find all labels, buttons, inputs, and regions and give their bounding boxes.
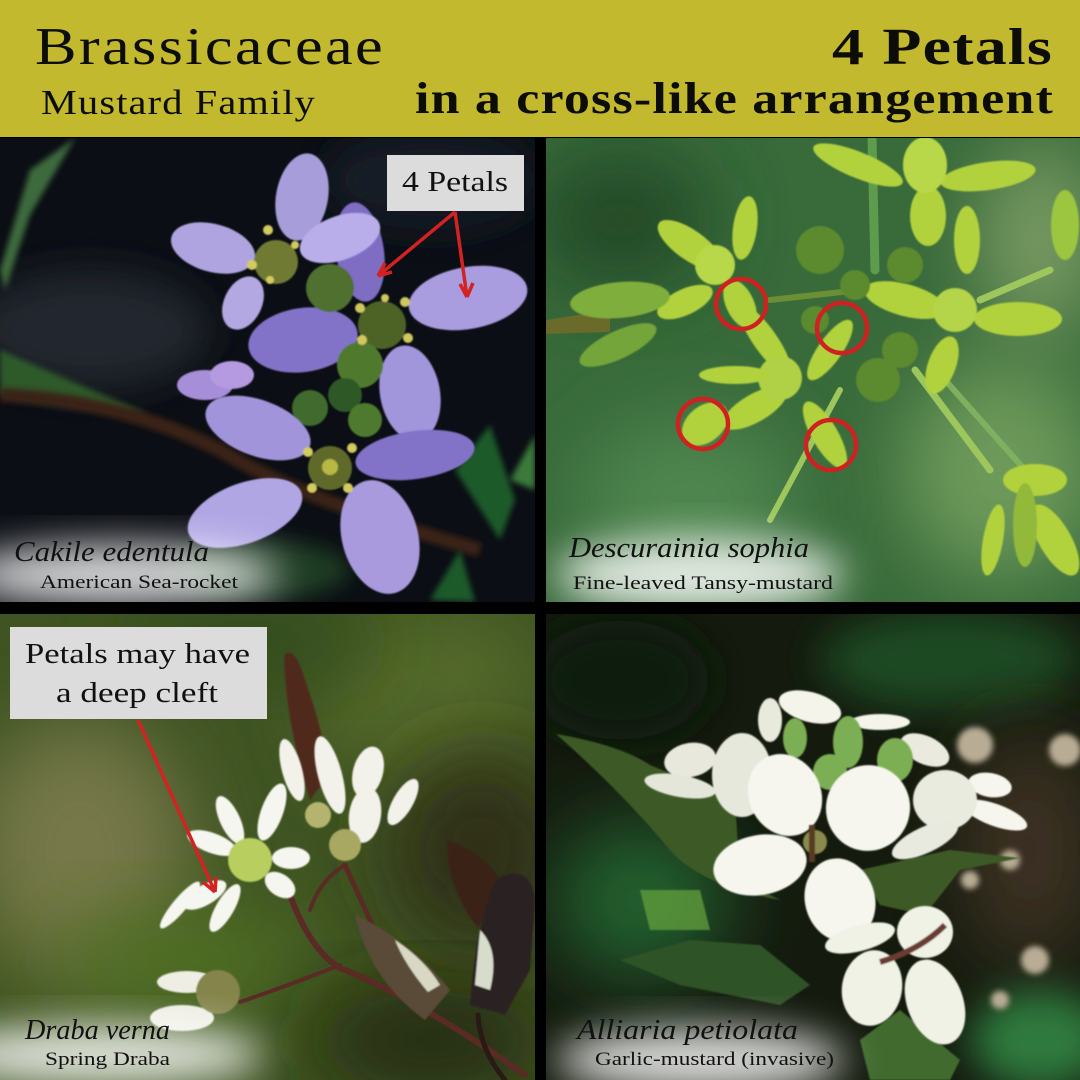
panel: Cakile edentula xyxy=(0,130,540,605)
label: Alliaria petiolata: Alliaria petiolata xyxy=(575,1015,798,1046)
buds xyxy=(783,716,913,790)
label glow xyxy=(0,1025,265,1080)
title: Brassicaceae: Brassicaceae xyxy=(35,18,385,76)
flower: middle xyxy=(244,199,532,445)
label: Alliaria petiolata: Garlic-mustard (invasive) xyxy=(595,1049,834,1070)
subtitle: Mustard Family: Mustard Family xyxy=(41,83,316,122)
flower: lower xyxy=(177,361,478,603)
label glow xyxy=(555,1028,845,1080)
heading: 4 Petals: 4 Petals xyxy=(832,19,1053,76)
stems xyxy=(240,865,525,1080)
flower: lower xyxy=(824,905,966,1046)
callout: deep cleft: a deep cleft xyxy=(56,677,218,709)
arrow: to inner petal xyxy=(378,212,455,276)
flower: upper xyxy=(165,149,387,336)
flower: front petals xyxy=(712,753,1028,939)
flower group: yellow-green xyxy=(569,135,1080,583)
label: Descurainia sophia: Descurainia sophia xyxy=(568,533,809,564)
label glow xyxy=(0,545,280,605)
label: Draba verna: Spring Draba xyxy=(45,1049,171,1070)
leaves xyxy=(556,734,1020,1080)
label: Cakile edentula: American Sea-rocket xyxy=(40,572,239,593)
panel: Draba verna xyxy=(0,600,570,1080)
header banner xyxy=(0,0,1080,137)
label: Descurainia sophia xyxy=(568,533,834,594)
heading: cross-like arrangement: in a cross-like arrangement xyxy=(415,74,1054,123)
panel: Alliaria petiolata xyxy=(530,610,1080,1080)
label: Cakile edentula: Cakile edentula xyxy=(14,537,209,568)
callout: deep cleft: Petals may have xyxy=(25,638,250,670)
seed pods xyxy=(284,653,535,1020)
arrow: to right petal xyxy=(455,212,473,297)
red circles marking four petals xyxy=(678,279,867,470)
label: Cakile edentula xyxy=(14,537,239,593)
callout: 4 Petals xyxy=(387,155,524,211)
label: Draba verna xyxy=(24,1015,171,1070)
flower: main white xyxy=(643,684,954,817)
callout: deep cleft xyxy=(10,627,267,719)
label: Draba verna: Draba verna xyxy=(24,1015,170,1046)
arrow: to cleft petal xyxy=(138,720,216,892)
label: Descurainia sophia: Fine-leaved Tansy-mustard xyxy=(573,573,834,594)
flower: center xyxy=(803,825,827,862)
flower: bottom left xyxy=(150,970,240,1031)
panel: Descurainia sophia xyxy=(530,135,1080,611)
callout: 4 Petals: 4 Petals xyxy=(402,166,508,198)
flower: white upper xyxy=(274,733,425,861)
label glow xyxy=(555,539,845,611)
flower: white main xyxy=(155,780,310,936)
label: Alliaria petiolata xyxy=(575,1015,834,1070)
